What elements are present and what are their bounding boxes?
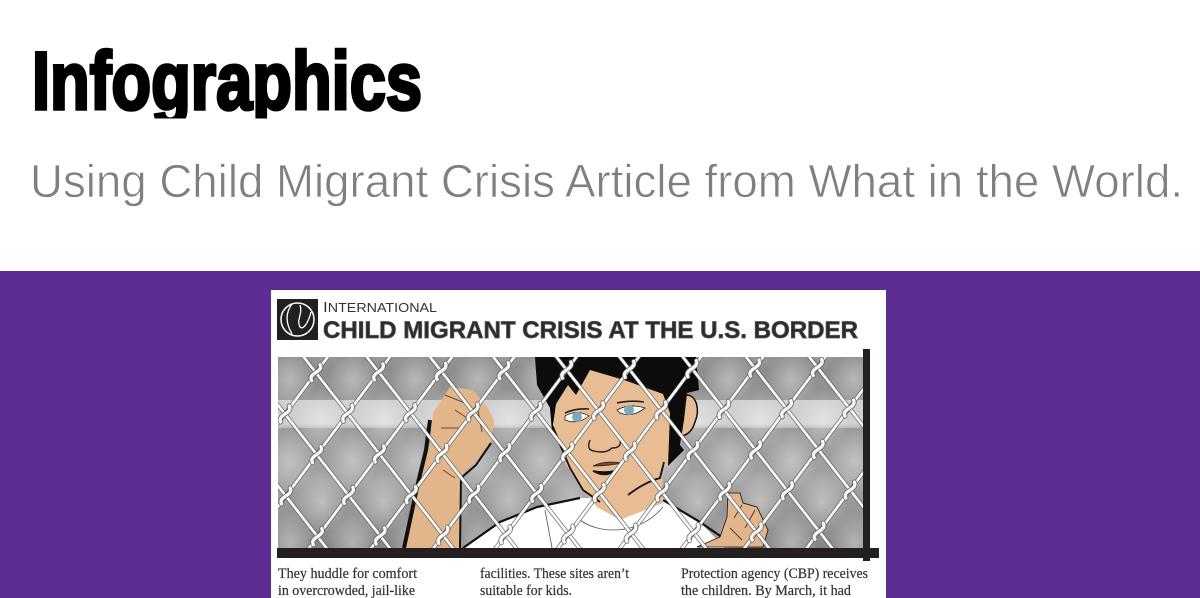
article body text: Protection agency (CBP) receives <box>681 566 868 582</box>
section label: INTERNATIONAL <box>323 299 437 316</box>
left arm and fist <box>404 387 494 548</box>
article body text: facilities. These sites aren’t <box>480 566 629 582</box>
shirt <box>463 498 726 548</box>
panel: article page <box>271 290 886 598</box>
subtitle: Using Child Migrant Crisis Article from What in the World. <box>30 155 1183 207</box>
hair <box>535 357 699 466</box>
chain-link fence <box>278 357 863 548</box>
right hand <box>697 493 768 547</box>
frame bars <box>277 349 879 561</box>
icon: globe logo <box>277 299 318 340</box>
illustration: child behind fence <box>278 357 863 548</box>
article body text <box>278 566 868 598</box>
nose and mouth <box>589 440 620 452</box>
title: Infographics <box>32 36 422 127</box>
purple band <box>0 271 1200 598</box>
eyes <box>565 401 645 422</box>
article body text: They huddle for comfort <box>278 566 417 582</box>
article headline: CHILD MIGRANT CRISIS AT THE U.S. BORDER <box>323 317 858 344</box>
wall background <box>278 357 863 548</box>
boy head and neck <box>535 357 699 520</box>
